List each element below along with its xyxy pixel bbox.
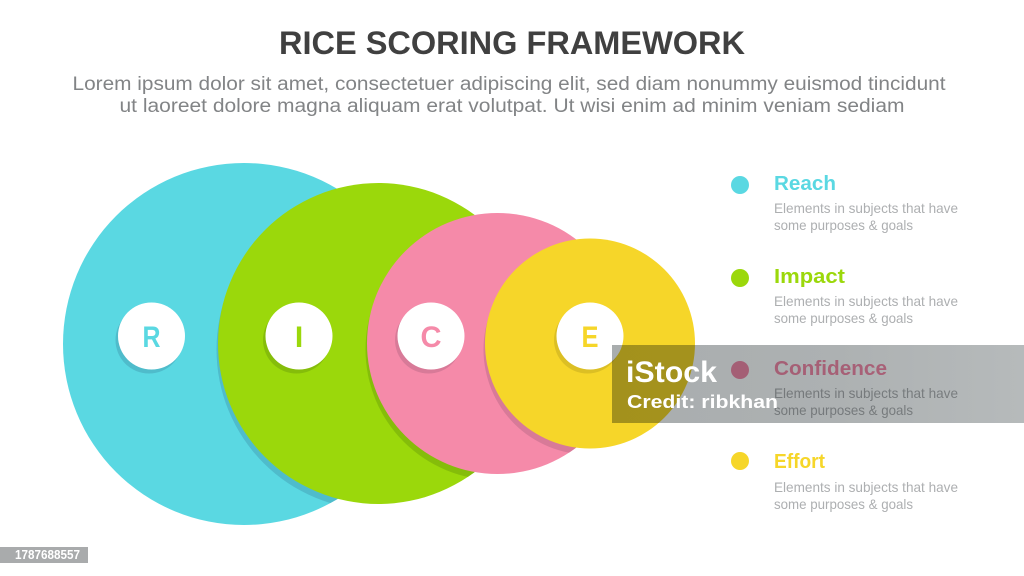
circle: impact: [218, 183, 539, 504]
legend: confidence: Elements in subjects that have: [774, 385, 958, 401]
watermark banner: [612, 345, 1024, 423]
legend: reach: Elements in subjects that have: [774, 200, 958, 216]
legend: impact: Impact: [774, 266, 845, 288]
badge C: [395, 302, 464, 374]
legend: impact: Elements in subjects that have: [774, 293, 958, 309]
shadow on reach circle: [216, 308, 338, 503]
subtitle text: Lorem ipsum dolor sit amet, consectetuer adipiscing elit, sed diam nonummy euismod tincidunt: [72, 74, 946, 95]
badge I: [263, 302, 332, 374]
circle: confidence: [367, 213, 628, 474]
overlapping circles diagram: [63, 163, 695, 525]
legend: confidence: Confidence: [774, 358, 887, 380]
badge E: [554, 302, 624, 374]
subtitle text: ut laoreet dolore magna aliquam erat volutpat. Ut wisi enim ad minim veniam sediam: [120, 96, 904, 117]
legend: confidence: some purposes & goals: [774, 402, 913, 418]
legend: effort: Elements in subjects that have: [774, 479, 958, 495]
circle: reach: [63, 163, 425, 525]
legend: impact: some purposes & goals: [774, 310, 913, 326]
legend: reach: some purposes & goals: [774, 217, 913, 233]
legend: impact: [731, 266, 958, 326]
badge R: R: [142, 321, 161, 354]
watermark credit text: Credit: ribkhan: [627, 392, 778, 412]
title: RICE SCORING FRAMEWORK: [279, 25, 745, 61]
legend: reach: Reach: [774, 173, 836, 195]
watermark logo text: iStock: [626, 356, 717, 389]
legend: confidence: [731, 358, 958, 418]
shadow on confidence circle: [484, 324, 576, 453]
circle: effort: [485, 238, 695, 448]
legend: effort: Effort: [774, 451, 825, 473]
badge I: I: [295, 321, 303, 354]
shadow on impact circle: [366, 316, 475, 477]
subtitle text: [72, 74, 946, 117]
legend: effort: [731, 451, 958, 512]
badge E: E: [582, 321, 598, 354]
legend: effort: some purposes & goals: [774, 496, 913, 512]
badge C: C: [420, 321, 442, 354]
badge R: [116, 302, 185, 374]
legend: reach: [731, 173, 958, 233]
image id tag: 1787688557: [15, 547, 80, 562]
